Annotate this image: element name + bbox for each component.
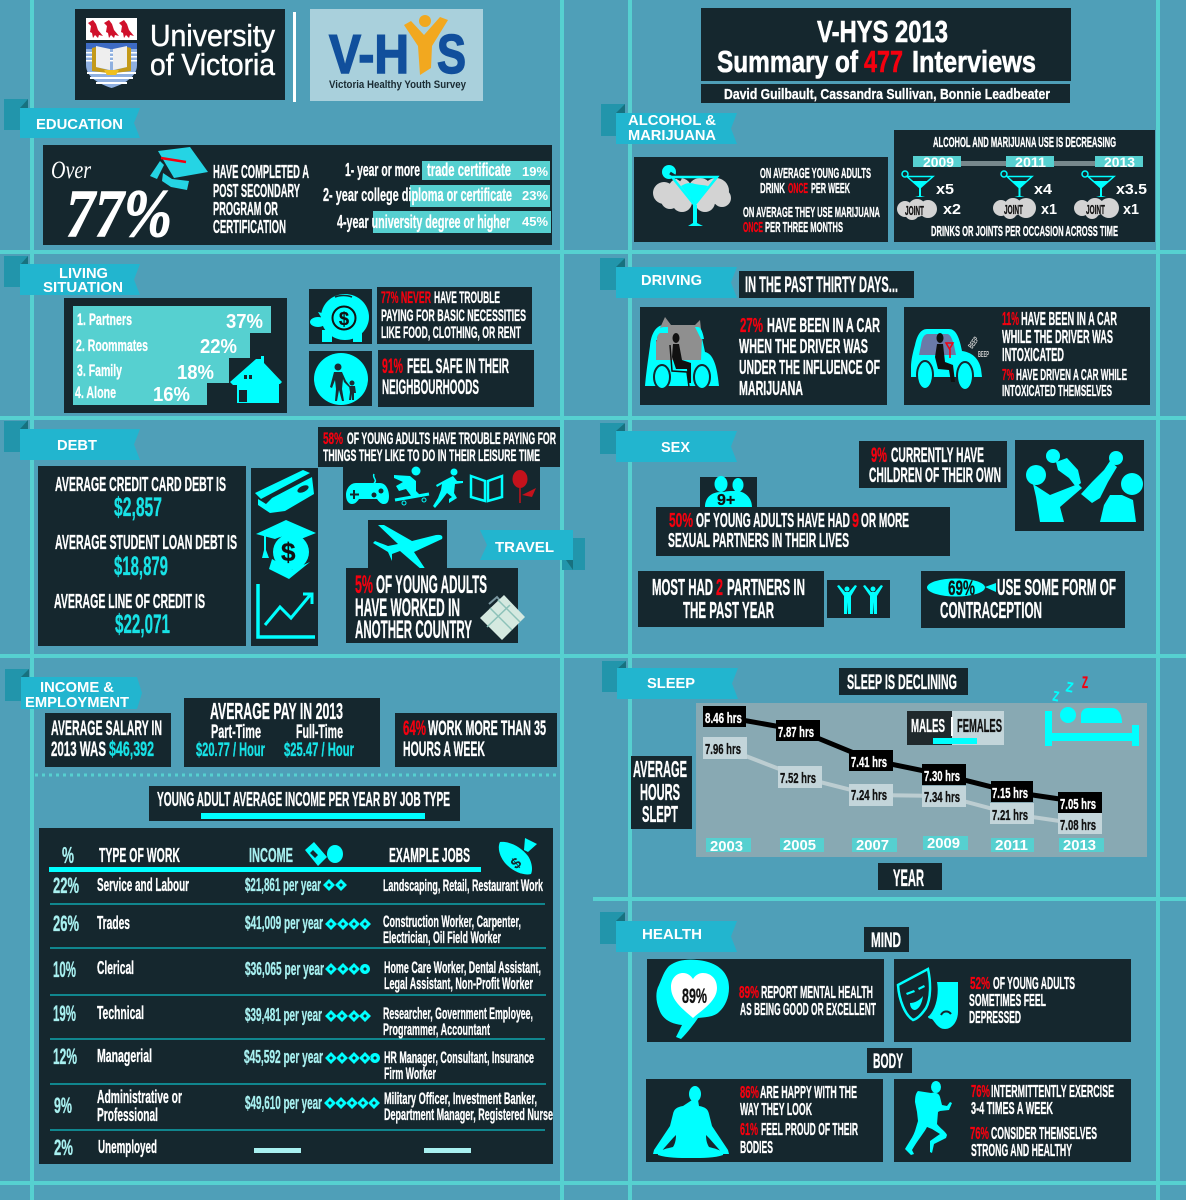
panel: marijuana driving: 27% <box>740 315 763 337</box>
panel: depression <box>894 959 1131 1042</box>
panel: living situation: 16% <box>153 384 190 406</box>
table: income by job type: TYPE OF WORK <box>99 845 180 867</box>
logo: University of Victoria <box>75 9 285 100</box>
females series: 7.24 hrs <box>851 787 887 804</box>
icon: runner <box>433 468 463 508</box>
panel: living situation: 1. Partners <box>77 310 132 329</box>
table row: administrative or professional: Administrative or <box>97 1087 182 1107</box>
text: average pay <box>184 698 380 767</box>
panel: alcohol frequency: ON AVERAGE YOUNG ADULTS <box>760 166 871 182</box>
panel: debt amounts: $2,857 <box>114 492 162 522</box>
year labels <box>706 836 1104 855</box>
males series: 7.30 hrs <box>924 768 960 785</box>
table row: trades <box>53 911 521 947</box>
table row: service and labour <box>53 873 543 898</box>
panel: depression: OF YOUNG ADULTS <box>993 973 1075 993</box>
text: sexual partners: OF YOUNG ADULTS HAVE HAD <box>696 510 850 532</box>
icon: nine plus partners: 9+ <box>717 492 735 509</box>
text: basic necessities <box>377 287 532 344</box>
text: worked abroad <box>346 568 525 644</box>
text: average pay: AVERAGE PAY IN 2013 <box>210 698 343 724</box>
logo: V-HYS: V-H <box>329 23 409 85</box>
panel: alcohol and marijuana trend: 2009 <box>923 155 954 170</box>
panel: body image: WAY THEY LOOK <box>740 1099 812 1119</box>
icon: brain with heart: 89% <box>682 985 707 1008</box>
text: average pay: $25.47 / Hour <box>284 740 354 761</box>
logo: V-HYS <box>310 9 483 101</box>
table row: managerial: Firm Worker <box>384 1064 436 1083</box>
icon: brain with heart <box>656 960 729 1039</box>
panel: exercise: 76% <box>971 1081 990 1101</box>
panel: alcohol and marijuana trend: x3.5 <box>1116 181 1147 198</box>
year labels: 2011 <box>995 838 1028 854</box>
table row: service and labour: Landscaping, Retail, Restaurant Work <box>383 876 543 895</box>
panel: debt amounts: $18,879 <box>114 551 168 581</box>
logo: University of Victoria: University <box>150 18 275 53</box>
panel: debt icons <box>251 468 318 646</box>
text: sexual partners: 50% <box>669 510 693 532</box>
text: sexual partners <box>656 507 950 556</box>
panel: alcohol driving: 11% <box>1002 309 1019 329</box>
text: leisure <box>318 427 560 467</box>
text: average pay: $20.77 / Hour <box>196 740 265 761</box>
panel: education: 1- year or more <box>345 160 420 180</box>
ribbon: alcohol and marijuana: ALCOHOL & <box>628 112 716 129</box>
text: average pay: Full-Time <box>296 722 343 743</box>
icon: nine plus partners <box>700 476 757 509</box>
panel: exercise: 3-4 TIMES A WEEK <box>971 1098 1053 1118</box>
year labels: 2013 <box>1063 838 1096 854</box>
panel: education: 45% <box>522 215 548 229</box>
icon: car with drink <box>911 329 989 390</box>
legend: FEMALES <box>957 716 1002 736</box>
panel: body image: 86% <box>740 1082 759 1102</box>
females series: 7.21 hrs <box>992 807 1028 824</box>
title: Summary of <box>717 44 859 79</box>
text: average pay: Part-Time <box>211 722 261 743</box>
panel: education: Over <box>51 157 91 184</box>
panel: marijuana driving <box>640 307 887 405</box>
icon: parent and child <box>309 351 372 406</box>
icon: martini and smoke <box>653 165 731 226</box>
panel: body image: 61% <box>740 1119 758 1139</box>
panel: depression: 52% <box>970 973 990 993</box>
text: partners past year: MOST HAD <box>652 574 713 600</box>
x axis label: year <box>878 863 942 892</box>
year labels: 2003 <box>710 839 743 855</box>
text: sexual partners: 9 <box>852 510 859 532</box>
y axis label: average hours slept <box>631 756 692 829</box>
panel: mental health <box>647 959 884 1042</box>
text: hours worked: WORK MORE THAN 35 <box>428 717 546 740</box>
panel: education <box>43 145 552 251</box>
table row: managerial <box>53 1044 534 1083</box>
males series: 7.05 hrs <box>1060 796 1096 813</box>
ribbon: living situation: LIVING <box>59 265 108 282</box>
y axis label: average hours slept: HOURS <box>640 779 680 805</box>
panel: alcohol frequency <box>634 157 888 242</box>
panel: mental health: 89% <box>739 982 759 1002</box>
text: safe neighbourhoods: 91% <box>382 355 403 378</box>
icon: joints: JOINT <box>1004 202 1023 217</box>
panel: body image: ARE HAPPY WITH THE <box>760 1082 857 1102</box>
panel: education: POST SECONDARY <box>213 180 300 201</box>
panel: education: HAVE COMPLETED A <box>213 161 309 182</box>
panel: alcohol and marijuana trend: x5 <box>936 181 954 198</box>
panel: exercise: 76% <box>970 1123 989 1143</box>
table row: administrative or professional <box>54 1087 553 1125</box>
title: V-HYS 2013 <box>817 14 948 49</box>
heading: income by job type: YOUNG ADULT AVERAGE INCOME PER YEAR BY JOB TYPE <box>157 789 450 811</box>
text: partners past year: PARTNERS IN <box>727 574 805 600</box>
text: partners past year: THE PAST YEAR <box>683 597 774 623</box>
panel: alcohol frequency: DRINK <box>760 181 785 197</box>
table row: clerical <box>53 957 541 993</box>
females series: 7.96 hrs <box>705 741 741 758</box>
text: worked abroad: OF YOUNG ADULTS <box>376 571 487 599</box>
ribbon: sex <box>600 423 737 462</box>
year labels: 2005 <box>783 838 816 854</box>
table row: clerical: Clerical <box>97 958 134 978</box>
panel: alcohol and marijuana trend <box>894 130 1155 242</box>
legend: MALES <box>911 716 945 736</box>
table row: managerial: 12% <box>53 1044 77 1069</box>
text: safe neighbourhoods: FEEL SAFE IN THEIR <box>407 355 509 378</box>
table row: unemployed: Unemployed <box>98 1137 157 1157</box>
icon: bed: Z <box>1082 673 1088 692</box>
title <box>701 8 1071 81</box>
icon: graduation cap with dollar: $ <box>281 537 296 567</box>
table row: trades: Electrician, Oil Field Worker <box>383 928 501 947</box>
panel: living situation: 3. Family <box>77 361 122 380</box>
table row: clerical: $36,065 per year <box>245 959 324 979</box>
legend <box>907 711 1004 745</box>
y axis label: average hours slept: AVERAGE <box>633 756 687 782</box>
panel: exercise <box>894 1079 1131 1162</box>
table row: clerical: Legal Assistant, Non-Profit Worker <box>384 974 533 993</box>
icon: airplane <box>368 520 447 570</box>
panel: alcohol and marijuana trend: x1 <box>1123 201 1139 218</box>
ribbon: driving: DRIVING <box>641 272 702 289</box>
text: leisure: THINGS THEY LIKE TO DO IN THEIR LEISURE TIME <box>323 446 540 465</box>
panel: education: 23% <box>522 189 548 203</box>
icon: car with drink: BEEP <box>966 335 981 350</box>
text: contraception <box>921 571 1125 628</box>
icon: piggy bank: $ <box>339 309 349 329</box>
table row: technical: Programmer, Accountant <box>383 1020 490 1039</box>
year labels: 2009 <box>927 836 960 852</box>
table row: trades: 26% <box>53 911 79 936</box>
icon: runner <box>905 1081 952 1155</box>
table row: service and labour: Service and Labour <box>97 875 189 895</box>
text: sexual partners: SEXUAL PARTNERS IN THEIR LIVES <box>668 530 849 552</box>
logo: University of Victoria: of Victoria <box>150 47 276 82</box>
ribbon: education <box>4 99 140 138</box>
icon: piggy bank <box>309 289 372 344</box>
text: basic necessities: PAYING FOR BASIC NECESSITIES <box>381 306 526 325</box>
panel: education: 2- year college diploma or certificate <box>323 185 512 205</box>
panel: living situation: 4. Alone <box>75 383 116 402</box>
males series: 7.87 hrs <box>778 724 814 741</box>
text: basic necessities: HAVE TROUBLE <box>434 288 500 307</box>
ribbon: health: HEALTH <box>642 926 702 943</box>
panel: debt amounts: AVERAGE LINE OF CREDIT IS <box>54 591 205 613</box>
table: income by job type: % <box>62 842 74 868</box>
panel: education: CERTIFICATION <box>213 216 286 237</box>
heading: past thirty days <box>739 271 914 298</box>
table row: service and labour: $21,861 per year <box>245 875 321 895</box>
icon: theatre masks <box>898 969 958 1029</box>
table row: technical: Technical <box>97 1003 144 1023</box>
table row: administrative or professional: 9% <box>54 1093 72 1118</box>
icon: skateboarder <box>394 466 429 505</box>
icon: house <box>230 356 282 403</box>
text: children: 9% <box>871 444 887 467</box>
females series: 7.52 hrs <box>780 770 816 787</box>
icon: car with smoke <box>645 317 719 389</box>
ribbon: sleep <box>602 661 738 699</box>
panel: alcohol and marijuana trend: 2011 <box>1015 155 1047 170</box>
panel: education: trade certificate <box>427 160 511 180</box>
females series <box>703 737 1102 834</box>
icon: money bag: $ <box>508 854 525 873</box>
table row: administrative or professional: Department Manager, Registered Nurse <box>384 1105 553 1124</box>
panel: alcohol driving <box>904 307 1150 405</box>
panel: alcohol driving: 7% <box>1002 367 1014 384</box>
text: children: CURRENTLY HAVE <box>891 444 984 467</box>
heading: sleep is declining <box>839 668 968 695</box>
ribbon: debt: DEBT <box>57 437 97 454</box>
panel: debt amounts <box>38 466 246 646</box>
males series: 7.41 hrs <box>851 754 887 771</box>
table row: trades: Trades <box>97 913 130 933</box>
panel: alcohol frequency: ON AVERAGE THEY USE MARIJUANA <box>743 205 880 221</box>
panel: living situation <box>64 298 287 413</box>
table row: service and labour: 22% <box>53 873 79 898</box>
panel: living situation: 18% <box>177 362 214 384</box>
icon: joints: JOINT <box>905 203 924 218</box>
males series <box>703 706 1102 813</box>
logo: V-HYS: S <box>437 23 466 85</box>
table row: administrative or professional: Professional <box>97 1105 158 1125</box>
text: average salary: 2013 WAS <box>51 738 106 761</box>
males series: 8.46 hrs <box>705 710 742 727</box>
icon: small martinis <box>902 171 1114 197</box>
heading: mind <box>864 927 909 952</box>
text: hours worked: HOURS A WEEK <box>403 738 485 761</box>
panel: marijuana driving: MARIJUANA <box>739 378 803 400</box>
ribbon: living situation: SITUATION <box>43 279 123 296</box>
ribbon: alcohol and marijuana <box>601 104 737 144</box>
table row: administrative or professional: Military Officer, Investment Banker, <box>384 1089 537 1108</box>
ribbon: debt <box>4 420 140 460</box>
panel: leisure icons <box>343 466 540 510</box>
table row: trades: $41,009 per year <box>245 913 323 933</box>
panel: exercise: STRONG AND HEALTHY <box>971 1140 1072 1160</box>
panel: alcohol and marijuana trend: x1 <box>1041 201 1057 218</box>
panel: alcohol frequency: ONCE <box>788 181 808 197</box>
icon: suitcase <box>480 595 525 640</box>
title: Interviews <box>912 44 1036 79</box>
authors: David Guilbault, Cassandra Sullivan, Bonnie Leadbeater <box>724 86 1050 103</box>
text: partners past year: 2 <box>716 574 723 600</box>
ribbon: living situation <box>4 256 140 296</box>
females series: 7.08 hrs <box>1060 817 1096 834</box>
heading: income by job type <box>149 786 460 821</box>
line chart: sleep hours <box>696 673 1147 857</box>
heading: body <box>867 1048 912 1073</box>
heading: sleep is declining: SLEEP IS DECLINING <box>847 671 957 694</box>
icon: rose <box>512 470 536 503</box>
ribbon: sleep: SLEEP <box>647 675 695 692</box>
table row: technical: $39,481 per year <box>245 1005 322 1025</box>
panel: marijuana driving: HAVE BEEN IN A CAR <box>767 315 880 337</box>
panel: debt amounts: AVERAGE CREDIT CARD DEBT IS <box>55 474 226 496</box>
panel: living situation: 2. Roommates <box>76 336 148 355</box>
panel: body image <box>646 1079 883 1162</box>
icon: graduation cap <box>150 147 208 190</box>
text: contraception: 69% <box>948 577 975 600</box>
panel: depression: SOMETIMES FEEL <box>969 990 1046 1010</box>
icon: money <box>305 842 343 866</box>
table row: administrative or professional: $49,610 per year <box>245 1093 322 1113</box>
ribbon: sex: SEX <box>661 439 690 456</box>
ribbon: driving <box>600 258 737 298</box>
panel: alcohol frequency: ONCE <box>743 220 763 236</box>
icon: bed: Z <box>1065 678 1075 695</box>
panel: debt amounts: AVERAGE STUDENT LOAN DEBT IS <box>55 532 237 554</box>
panel: marijuana driving: WHEN THE DRIVER WAS <box>739 336 868 358</box>
y axis label: average hours slept: SLEPT <box>642 801 678 827</box>
icon: car with drink: BEEP <box>978 350 989 359</box>
table row: unemployed <box>54 1135 471 1160</box>
panel: body image: BODIES <box>740 1137 773 1157</box>
text: children <box>859 441 1007 488</box>
table row: managerial: HR Manager, Consultant, Insurance <box>384 1048 534 1067</box>
panel: education: 77% <box>66 175 172 251</box>
text: average salary: $46,392 <box>109 738 154 761</box>
icon: money bag <box>499 838 537 874</box>
icon: parents with babies <box>1015 440 1144 531</box>
panel: education: 19% <box>522 165 548 179</box>
ribbon: health <box>600 912 737 952</box>
table row: clerical: 10% <box>53 957 76 982</box>
panel: education: 4-year university degree or higher <box>337 212 510 232</box>
text: average salary <box>45 713 171 767</box>
ribbon: income and employment <box>5 669 142 711</box>
panel: living situation: 22% <box>200 336 237 358</box>
icon: game controller <box>346 474 389 504</box>
panel: debt amounts: $22,071 <box>115 609 170 639</box>
icon: meditating figure <box>653 1086 729 1158</box>
text: leisure: OF YOUNG ADULTS HAVE TROUBLE PAYING FOR <box>347 429 556 448</box>
table row: managerial: Managerial <box>97 1046 152 1066</box>
text: basic necessities: LIKE FOOD, CLOTHING, OR RENT <box>381 323 521 342</box>
icon: joints: JOINT <box>1086 202 1105 217</box>
females series: 7.34 hrs <box>924 789 960 806</box>
x axis label: year: YEAR <box>893 865 924 892</box>
table row: clerical: Home Care Worker, Dental Assistant, <box>384 958 541 977</box>
icon: credit cards <box>255 470 314 513</box>
text: leisure: 58% <box>323 429 343 448</box>
panel: alcohol frequency: PER THREE MONTHS <box>765 220 843 236</box>
panel: mental health: AS BEING GOOD OR EXCELLENT <box>740 999 876 1019</box>
heading: body: BODY <box>873 1050 903 1073</box>
table row: trades: Construction Worker, Carpenter, <box>383 912 521 931</box>
logo: V-HYS: Victoria Healthy Youth Survey <box>329 79 467 91</box>
icon: joints <box>897 198 1119 220</box>
panel: body image: FEEL PROUD OF THEIR <box>761 1119 858 1139</box>
text: safe neighbourhoods: NEIGHBOURHOODS <box>382 376 479 399</box>
icon: open book <box>471 476 502 501</box>
panel: alcohol and marijuana trend: x4 <box>1034 181 1053 198</box>
heading: mind: MIND <box>871 929 901 952</box>
ribbon: alcohol and marijuana: MARIJUANA <box>628 127 716 144</box>
ribbon: education: EDUCATION <box>36 116 123 133</box>
icon: growth chart <box>258 584 315 637</box>
table row: managerial: $45,592 per year <box>244 1047 323 1067</box>
text: partners past year <box>638 571 824 627</box>
males series: 7.15 hrs <box>992 785 1028 802</box>
icon: two people <box>827 580 890 618</box>
table: income by job type <box>39 828 553 1164</box>
text: hours worked: 64% <box>403 717 426 740</box>
panel: education: PROGRAM OR <box>213 198 278 219</box>
table row: unemployed: 2% <box>54 1135 73 1160</box>
text: contraception: CONTRACEPTION <box>940 597 1042 623</box>
ribbon: income and employment: INCOME & <box>40 679 114 696</box>
ribbon: travel: TRAVEL <box>495 539 554 556</box>
table row: technical <box>53 1001 533 1039</box>
table row: technical: 19% <box>53 1001 76 1026</box>
panel: alcohol driving: INTOXICATED <box>1002 345 1064 365</box>
year labels: 2007 <box>856 838 889 854</box>
panel: alcohol and marijuana trend: 2013 <box>1104 155 1135 170</box>
text: worked abroad: 5% <box>355 571 373 599</box>
panel: alcohol and marijuana trend: x2 <box>943 201 961 218</box>
icon: bed <box>1045 673 1139 746</box>
text: basic necessities: 77% NEVER <box>381 288 431 307</box>
icon: graduation cap with dollar <box>256 520 316 579</box>
heading: past thirty days: IN THE PAST THIRTY DAYS... <box>745 272 898 297</box>
text: worked abroad: HAVE WORKED IN <box>355 594 460 622</box>
panel: living situation: 37% <box>226 311 263 333</box>
icon: bed: Z <box>1052 688 1061 704</box>
text: average salary: AVERAGE SALARY IN <box>51 717 162 740</box>
text: safe neighbourhoods <box>378 350 534 407</box>
panel: depression: DEPRESSED <box>969 1007 1021 1027</box>
title: 477 <box>864 44 903 79</box>
table row: technical: Researcher, Government Employee, <box>383 1004 533 1023</box>
ribbon: income and employment: EMPLOYMENT <box>25 694 129 711</box>
text: sexual partners: OR MORE <box>861 510 909 532</box>
table: income by job type: INCOME <box>249 845 293 867</box>
text: children: CHILDREN OF THEIR OWN <box>869 464 1001 487</box>
text: hours worked <box>395 713 557 767</box>
panel: marijuana driving: UNDER THE INFLUENCE OF <box>739 357 880 379</box>
panel: alcohol frequency: PER WEEK <box>811 181 850 197</box>
ribbon: travel <box>480 530 585 570</box>
text: worked abroad: ANOTHER COUNTRY <box>355 616 472 644</box>
table: income by job type: EXAMPLE JOBS <box>389 845 470 867</box>
panel: mental health: REPORT MENTAL HEALTH <box>761 982 873 1002</box>
